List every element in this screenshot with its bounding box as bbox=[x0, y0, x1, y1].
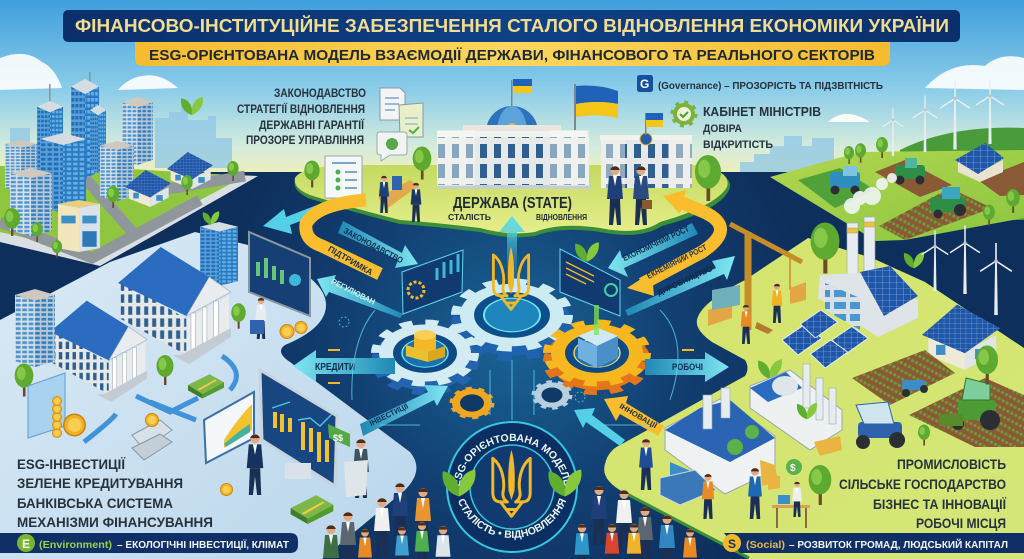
cabinet building bbox=[600, 133, 692, 188]
chimneys bbox=[847, 217, 875, 279]
tree bbox=[695, 155, 721, 201]
text block: state functions bbox=[237, 88, 366, 147]
tree and sprout bbox=[811, 222, 924, 274]
crowd left bbox=[323, 483, 450, 559]
seated analyst bbox=[250, 298, 267, 339]
arrow: economic growth yellow band bbox=[627, 190, 721, 296]
environment band: – ЕКОЛОГІЧНІ ІНВЕСТИЦІЇ, КЛІМАТ bbox=[117, 538, 290, 551]
handshake officials bbox=[607, 166, 652, 225]
environment band bbox=[0, 533, 298, 553]
presenter bbox=[247, 434, 263, 495]
dollar bubble bbox=[786, 459, 802, 475]
leaf over dashboard bbox=[575, 242, 599, 262]
text block: cabinet: ДОВІРА bbox=[703, 123, 742, 135]
panel: right productive sector bbox=[604, 173, 1024, 559]
wind turbines bbox=[883, 80, 1004, 156]
gear: finance bbox=[377, 323, 473, 391]
environment band: (Environment) bbox=[39, 539, 112, 551]
leaf sprout bbox=[758, 359, 782, 379]
arrow: lower right cyan bbox=[574, 408, 625, 446]
flag: dome bbox=[513, 79, 532, 93]
arrow: economic growth cyan bbox=[608, 222, 698, 277]
badge: ESG model bbox=[442, 421, 582, 553]
small flow arrows bbox=[328, 350, 694, 383]
text block: state functions: ПРОЗОРЕ УПРАВЛІННЯ bbox=[246, 135, 364, 147]
badge leaves bbox=[442, 470, 582, 496]
crates and hut bbox=[708, 282, 806, 334]
text block: finance: ЗЕЛЕНЕ КРЕДИТУВАННЯ bbox=[17, 475, 183, 491]
trees bbox=[809, 346, 998, 505]
solar panels bbox=[782, 310, 868, 368]
text block: finance bbox=[17, 456, 213, 530]
distant skyline bbox=[10, 106, 850, 172]
title banner bbox=[63, 10, 960, 42]
governance heading: G bbox=[640, 77, 649, 91]
solar house bbox=[922, 305, 1000, 370]
bank building large bbox=[118, 247, 231, 364]
solar houses bbox=[125, 152, 213, 207]
text block: state functions: СТРАТЕГІЇ ВІДНОВЛЕННЯ bbox=[237, 103, 365, 116]
badge bottom text: СТАЛІСТЬ • ВІДНОВЛЕННЯ bbox=[458, 498, 566, 540]
dollar tag: $$ bbox=[333, 433, 343, 443]
cash bbox=[188, 374, 333, 524]
text block: finance: БАНКІВСЬКА СИСТЕМА bbox=[17, 495, 173, 511]
fields bbox=[798, 160, 1024, 240]
tree near banks bbox=[15, 355, 174, 396]
monitor upper bbox=[249, 232, 310, 316]
badge trident bbox=[493, 450, 530, 516]
solar barn bbox=[955, 143, 1004, 182]
gear: production bbox=[549, 323, 645, 391]
label: виробництво: ДИРОБНИЦТВО bbox=[656, 264, 714, 297]
dollar tag bbox=[328, 424, 350, 447]
smoke bbox=[844, 173, 897, 214]
icon: gold stack on gear bbox=[406, 330, 445, 362]
gear: centre bbox=[458, 283, 566, 357]
wind turbines over lower land bbox=[922, 226, 1011, 315]
crane bbox=[730, 224, 802, 330]
green tractor bbox=[939, 378, 1000, 430]
bank building small bbox=[50, 301, 147, 402]
tree left bbox=[304, 160, 320, 188]
arrow: regulation bbox=[317, 275, 403, 318]
negotiation table bbox=[378, 176, 421, 222]
arrow: left cyan bbox=[263, 205, 322, 234]
social band: – РОЗВИТОК ГРОМАД, ЛЮДСЬКИЙ КАПІТАЛ bbox=[789, 538, 1008, 551]
label: економічний рост: ЕКОНОМІЧНИЙ РОСТ bbox=[621, 222, 691, 263]
text block: real sector: ПРОМИСЛОВІСТЬ bbox=[897, 456, 1006, 472]
trees bbox=[4, 161, 239, 258]
bank office tower bbox=[200, 222, 238, 286]
coin bbox=[220, 483, 233, 496]
label: регулювання: РЕГУЛЮВАН bbox=[330, 277, 377, 307]
icon: blue cube on gear bbox=[578, 305, 618, 368]
parliament building bbox=[437, 80, 591, 189]
environment band: E bbox=[22, 537, 30, 551]
text block: finance: МЕХАНІЗМИ ФІНАНСУВАННЯ bbox=[17, 514, 213, 530]
text block: cabinet: ВІДКРИТІСТЬ bbox=[703, 139, 773, 151]
arrow: investments bbox=[360, 385, 448, 436]
river / central water bbox=[0, 172, 1024, 559]
icon: documents bbox=[380, 88, 423, 137]
text block: cabinet bbox=[703, 104, 821, 151]
icon: speech bubble bbox=[377, 132, 407, 161]
industrial plant with solar roof bbox=[818, 266, 918, 337]
podium speaker bbox=[344, 439, 369, 498]
panel: left financial bank bbox=[0, 211, 416, 559]
arrow: innovation bbox=[604, 396, 664, 436]
arrow: credits bbox=[293, 350, 395, 382]
panel: dashboard right bbox=[560, 249, 620, 316]
panel: farmland bbox=[770, 80, 1024, 241]
fields bbox=[852, 350, 1024, 447]
crowd right bbox=[575, 486, 697, 559]
planter machine bbox=[660, 470, 716, 505]
scroll document bbox=[325, 156, 362, 198]
governance heading: (Governance) – ПРОЗОРІСТЬ ТА ПІДЗВІТНІСТЬ bbox=[658, 80, 883, 92]
text block: cabinet: КАБІНЕТ МІНІСТРІВ bbox=[703, 104, 821, 119]
small blue robot tractor bbox=[902, 380, 928, 397]
label: економічний рост 2: ЕКНЕМІЯНИЙ РОСТ bbox=[645, 243, 708, 281]
panel: state island bbox=[295, 79, 730, 237]
server stack with coin bbox=[132, 413, 172, 460]
road bbox=[0, 150, 245, 258]
workers bbox=[741, 284, 782, 344]
social band: S bbox=[728, 537, 736, 551]
tree bbox=[231, 303, 246, 329]
gear: small orange bbox=[452, 389, 492, 417]
arrow: legislation bbox=[338, 221, 418, 268]
text block: state functions: ЗАКОНОДАВСТВО bbox=[274, 88, 366, 100]
flag: large bbox=[574, 84, 618, 130]
subtitle banner bbox=[135, 42, 890, 66]
gear: small silver bbox=[534, 382, 570, 408]
flag: cabinet bbox=[645, 113, 663, 135]
boxes bbox=[760, 460, 780, 490]
state label: СТАЛІСТЬ bbox=[448, 213, 491, 222]
main factory bbox=[665, 388, 775, 494]
large monitor bbox=[260, 370, 337, 486]
title text: ФІНАНСОВО-ІНСТИТУЦІЙНЕ ЗАБЕЗПЕЧЕННЯ СТАЛОГО ВІДНОВЛЕННЯ ЕКОНОМІКИ УКРАЇНИ bbox=[75, 15, 949, 36]
label: кредити: КРЕДИТИ bbox=[315, 362, 355, 373]
social band: (Social) bbox=[746, 539, 785, 551]
blue tractor bbox=[856, 402, 905, 449]
text block: real sector: РОБОЧІ МІСЦЯ bbox=[916, 515, 1006, 531]
text block: real sector bbox=[839, 456, 1007, 531]
clouds bbox=[0, 54, 1024, 122]
arrow: workers bbox=[645, 352, 729, 382]
coins bbox=[280, 321, 307, 338]
state label: ВІДНОВЛЕННЯ bbox=[536, 213, 587, 222]
governance heading bbox=[637, 75, 883, 92]
text block: real sector: БІЗНЕС ТА ІННОВАЦІЇ bbox=[873, 496, 1007, 512]
city towers bbox=[5, 72, 153, 252]
arrow: production bbox=[625, 256, 735, 316]
text block: state functions: ДЕРЖАВНІ ГАРАНТІЇ bbox=[259, 119, 365, 132]
state label: ДЕРЖАВА (STATE) bbox=[453, 195, 572, 212]
icon: trident over gear bbox=[493, 247, 529, 309]
icon: green check gear bbox=[672, 102, 696, 126]
document panel with coin stack bbox=[28, 373, 85, 438]
flow arrows bbox=[84, 356, 236, 442]
tree centre bbox=[413, 146, 431, 180]
badge top text: ESG-ОРІЄНТОВАНА МОДЕЛЬ bbox=[454, 434, 570, 486]
trees row bbox=[844, 137, 1020, 226]
panel: city land bbox=[0, 72, 258, 266]
people on factory yard bbox=[639, 439, 762, 519]
panel: dashboard left bbox=[402, 250, 463, 314]
label: підтримка: ПІДТРИМКА bbox=[326, 244, 375, 277]
factory with chimneys bbox=[750, 364, 842, 456]
label: інновації: ІННОВАЦІЇ bbox=[618, 401, 660, 431]
chart board bbox=[204, 392, 254, 463]
social band bbox=[723, 533, 1024, 553]
office tower left bbox=[15, 289, 55, 367]
leaf sprout bbox=[181, 97, 203, 115]
label: робочі: РОБОЧІ bbox=[672, 362, 703, 373]
flow: up arrow bbox=[499, 216, 525, 292]
label: інвестиції: ІНВЕСТИЦІЇ bbox=[368, 401, 410, 428]
desk worker bbox=[772, 482, 810, 528]
leaf on tower bbox=[203, 211, 219, 225]
arrow: support yellow band bbox=[306, 200, 380, 277]
dollar bubble: $ bbox=[790, 463, 796, 474]
subtitle text: ESG-ОРІЄНТОВАНА МОДЕЛЬ ВЗАЄМОДІЇ ДЕРЖАВИ, ФІНАНСОВОГО ТА РЕАЛЬНОГО СЕКТОРІВ bbox=[149, 47, 875, 64]
label: законодавство: ЗАКОНОДАВСТВО bbox=[342, 225, 405, 265]
tractors bbox=[830, 158, 966, 218]
circuit traces bbox=[339, 310, 678, 425]
text block: finance: ESG-ІНВЕСТИЦІЇ bbox=[17, 456, 126, 472]
sky background bbox=[0, 0, 1024, 180]
state label bbox=[448, 195, 587, 222]
